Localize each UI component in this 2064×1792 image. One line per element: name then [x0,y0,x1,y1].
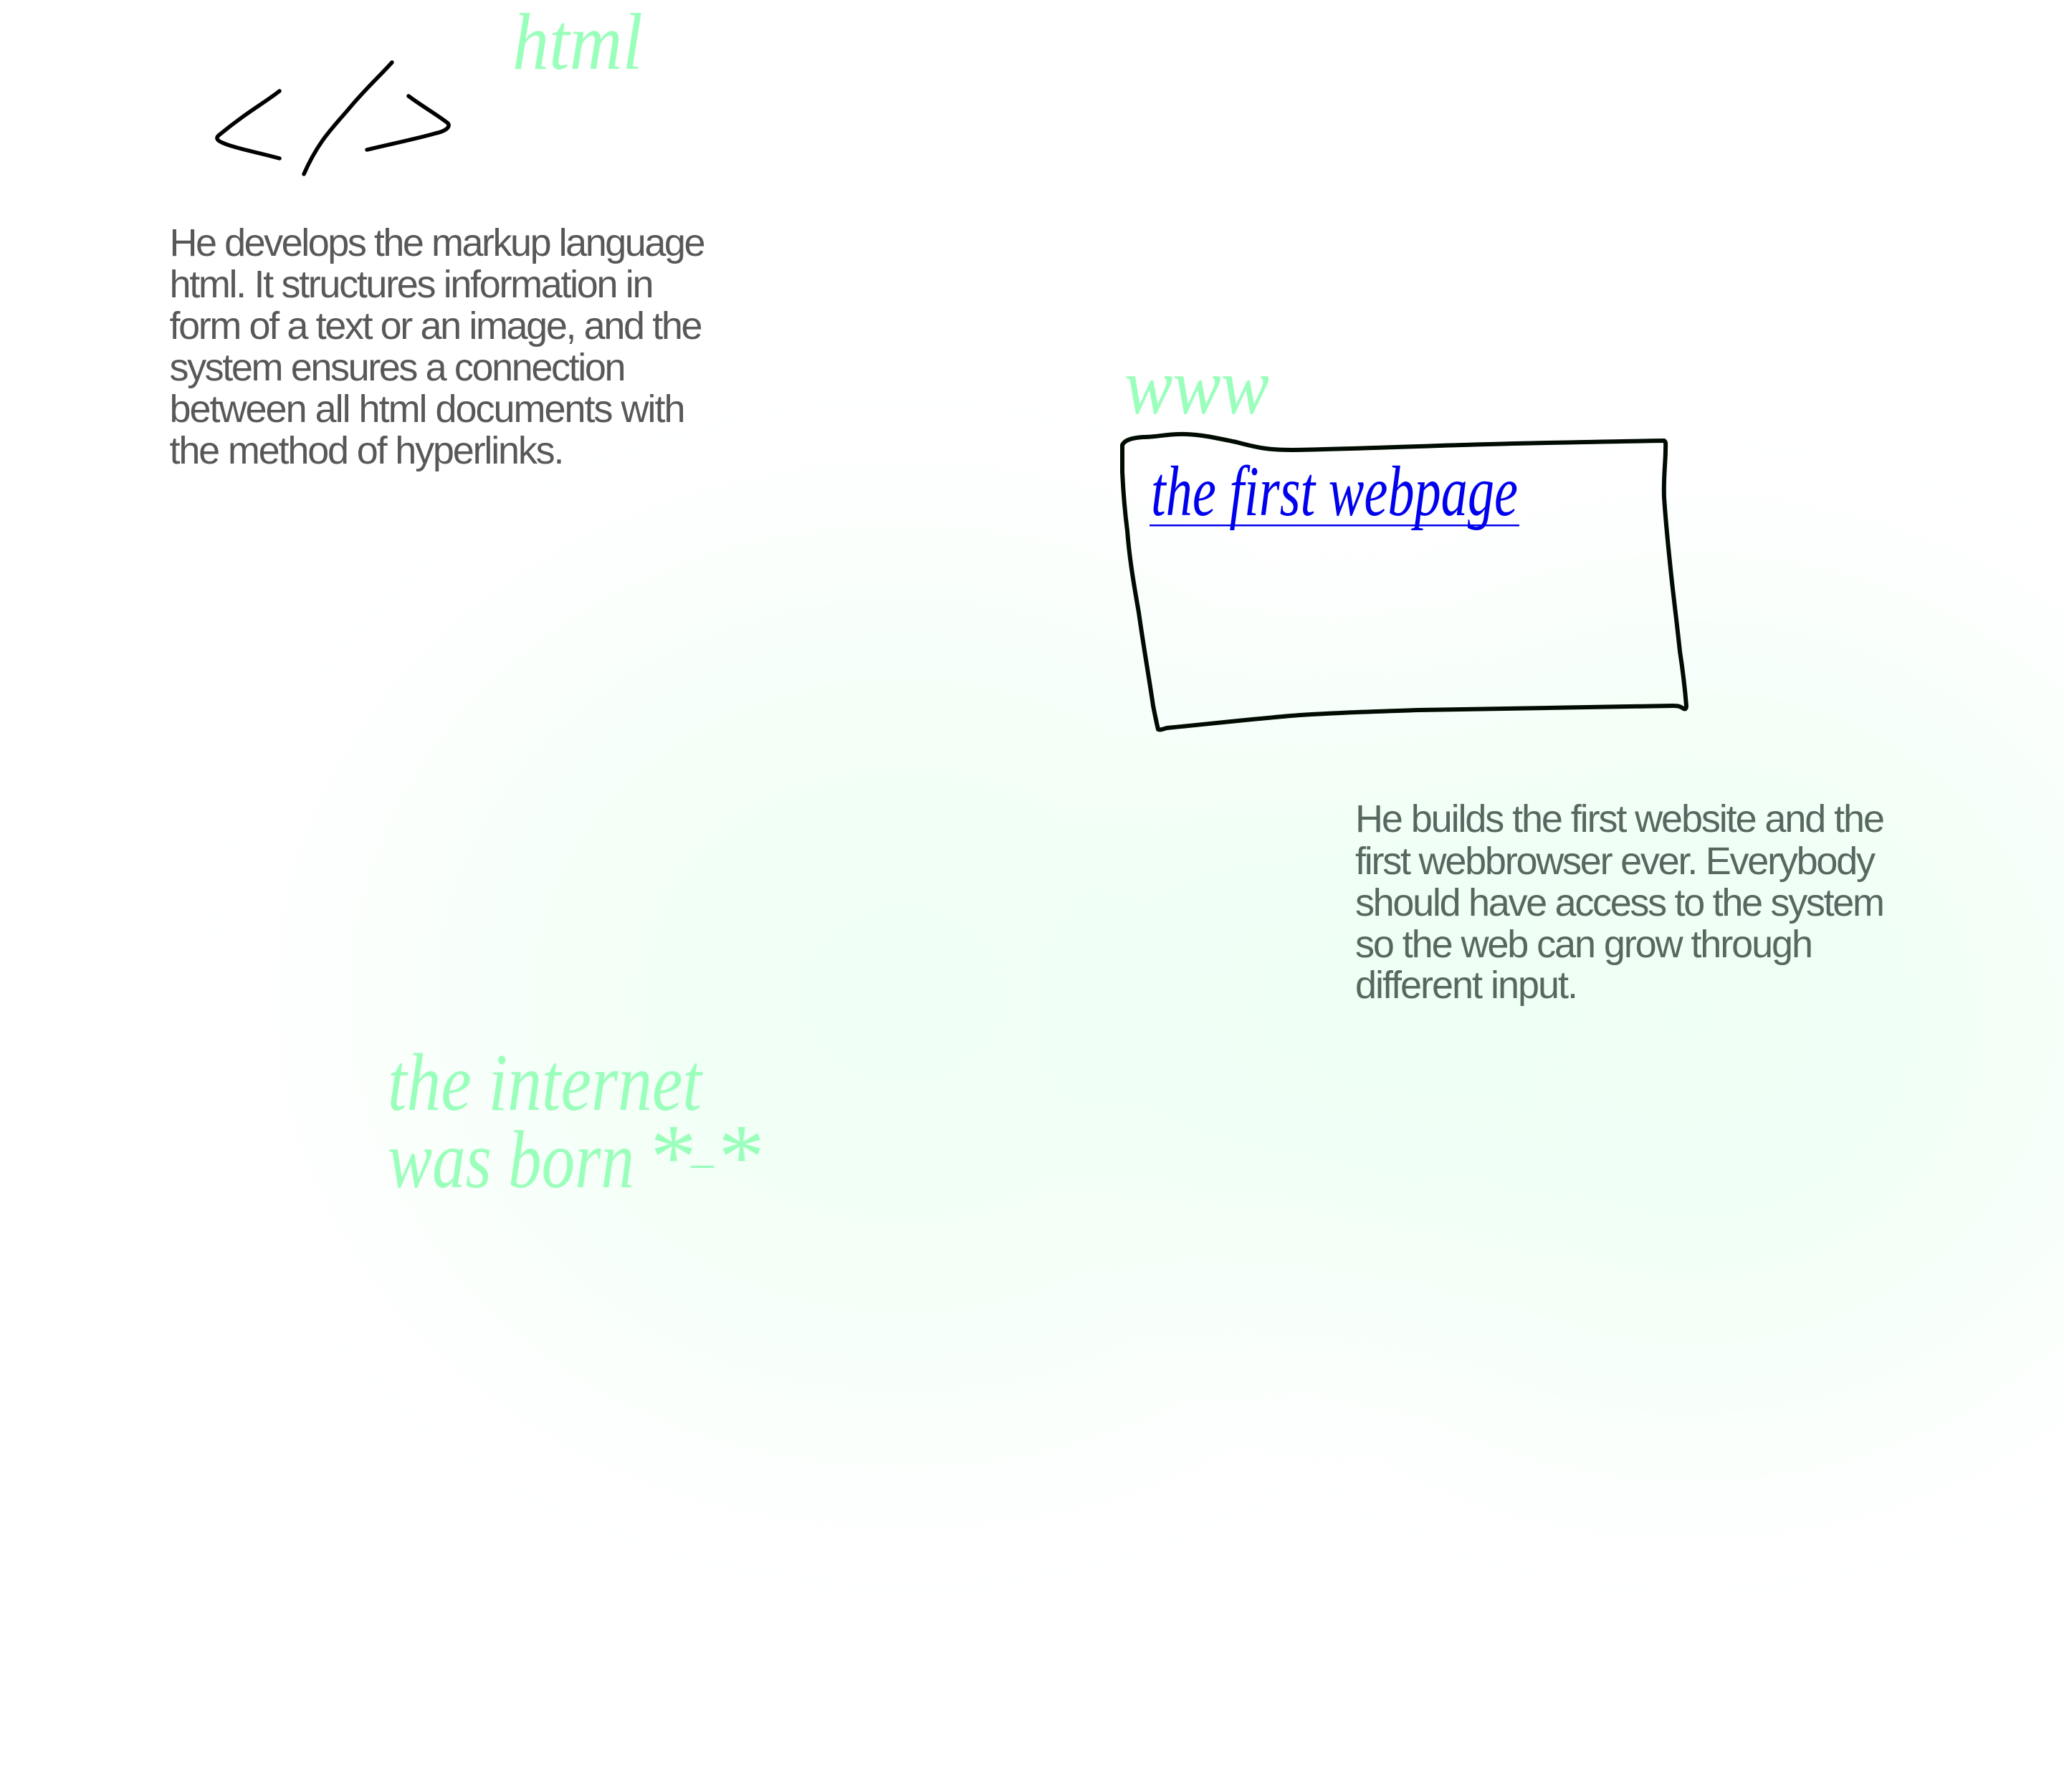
text block: html description: system ensures a connection [169,346,626,389]
heading: the internet was born: _ [690,1121,715,1172]
heading: the internet was born: * [646,1106,692,1209]
text block: www description: should have access to the system [1355,881,1885,924]
text block: www description: so the web can grow through [1355,923,1813,966]
text block: www description: He builds the first website and the [1355,797,1885,840]
heading: the internet was born: the internet [388,1037,703,1128]
heading: www: www [1124,342,1269,431]
heading: html: html [512,0,643,87]
icon: hand-drawn code tag [217,62,449,174]
text block: html description: between all html documents with [169,388,685,431]
text block: html description [169,221,705,472]
text block: html description: He develops the markup language [169,221,705,264]
panel: hand-drawn browser window [1122,434,1686,729]
text block: www description: first webbrowser ever. Everybody [1355,840,1876,883]
text block: html description: html. It structures information in [169,263,654,306]
heading: the internet was born: * [714,1106,760,1209]
text block: www description: different input. [1355,964,1578,1007]
text block: html description: form of a text or an image, and the [169,305,702,348]
heading: the internet was born: was born [388,1114,634,1205]
text block: www description [1355,797,1885,1007]
link: the first webpage: the first webpage [1151,451,1518,531]
text block: html description: the method of hyperlinks. [169,429,565,472]
heading: the internet was born [388,1037,760,1209]
